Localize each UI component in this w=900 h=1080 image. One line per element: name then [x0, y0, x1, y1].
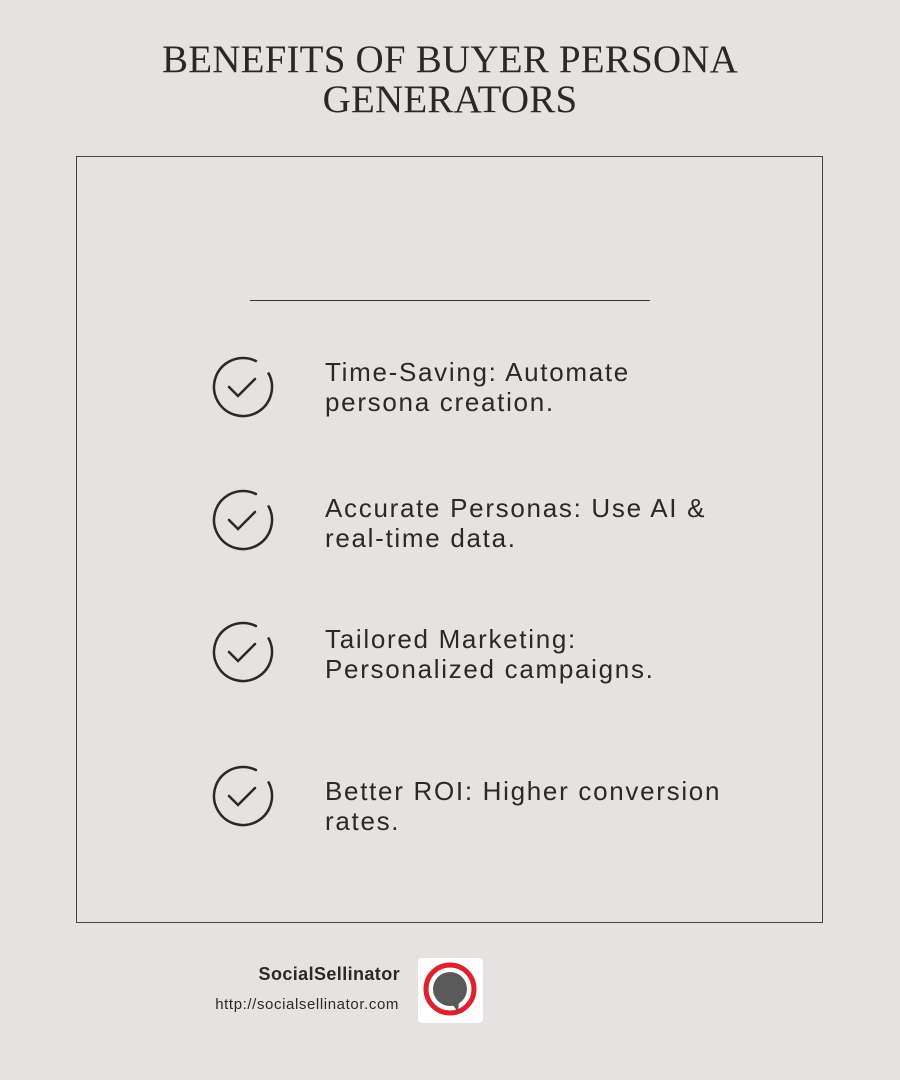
text: persona creation. [325, 387, 555, 417]
text: Better ROI: Higher conversion [325, 776, 721, 806]
icon: check circle [212, 356, 274, 418]
icon: check circle [212, 766, 274, 826]
text: Accurate Personas: Use AI & [325, 493, 706, 523]
text: rates. [325, 806, 400, 836]
item: tailored marketing [212, 622, 655, 684]
title: BENEFITS OF BUYER PERSONA [162, 38, 738, 81]
text [325, 493, 706, 553]
icon: logo [418, 958, 483, 1023]
title [162, 38, 738, 121]
text: Tailored Marketing: [325, 624, 577, 654]
text [325, 624, 655, 684]
brand name: SocialSellinator [259, 964, 400, 984]
text [325, 357, 630, 417]
item: time-saving [212, 356, 630, 418]
text: Personalized campaigns. [325, 654, 655, 684]
panel: benefits box [76, 156, 823, 923]
item: better roi [212, 766, 721, 836]
text [325, 776, 721, 836]
url: http://socialsellinator.com [215, 996, 399, 1013]
item: accurate personas [212, 490, 706, 553]
title: GENERATORS [323, 78, 577, 121]
text: Time-Saving: Automate [325, 357, 630, 387]
icon: check circle [212, 490, 274, 550]
text: real-time data. [325, 523, 517, 553]
icon: check circle [212, 622, 274, 682]
